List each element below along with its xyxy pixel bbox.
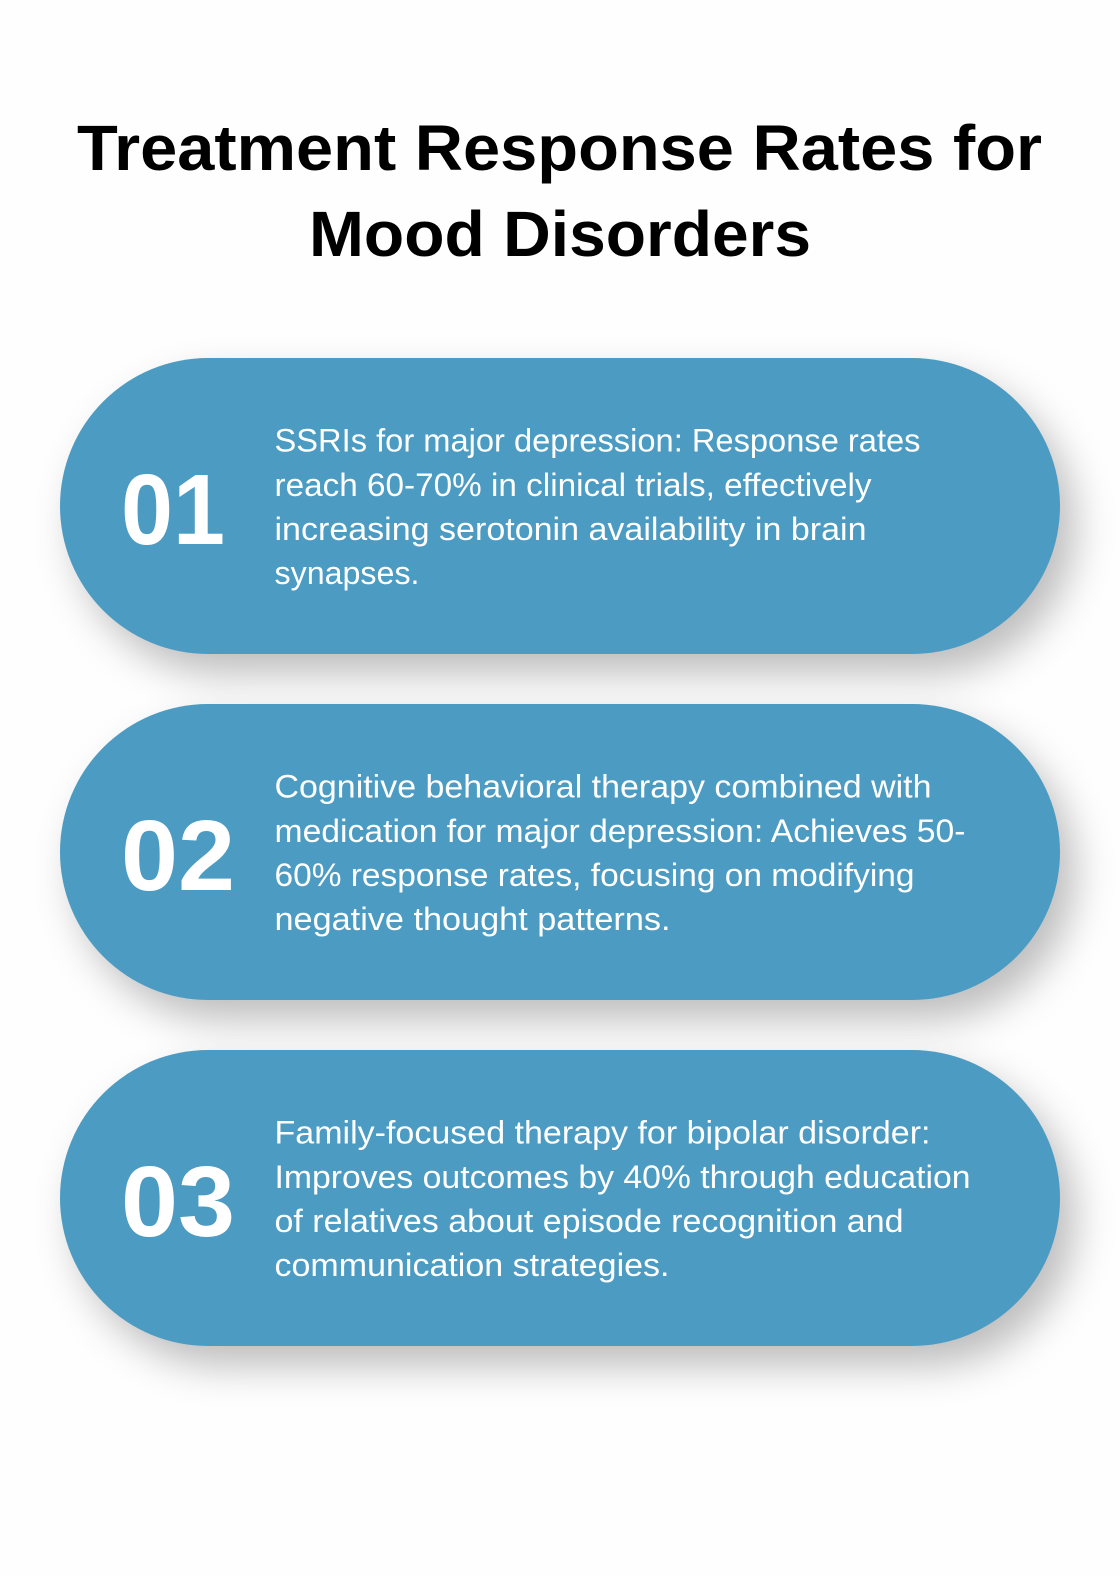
text block: family-focused therapy	[274, 1114, 970, 1283]
panel: family-focused therapy	[60, 1050, 1060, 1346]
title: Mood Disorders	[309, 198, 811, 270]
text block: SSRIs: increasing serotonin availability in brain	[274, 511, 866, 547]
text block: SSRIs: synapses.	[274, 555, 420, 591]
title: Treatment Response Rates for	[77, 112, 1042, 184]
text block: family-focused therapy: of relatives about episode recognition and	[274, 1203, 904, 1239]
text block: SSRIs: reach 60-70% in clinical trials, effectively	[274, 467, 872, 503]
text block: CBT	[274, 768, 966, 937]
text block: SSRIs: SSRIs for major depression: Response rates	[274, 422, 920, 458]
text block: CBT: Cognitive behavioral therapy combined with	[274, 768, 932, 804]
number 02: 02	[121, 800, 235, 912]
text block: family-focused therapy: communication strategies.	[274, 1247, 670, 1283]
text block: SSRIs	[274, 422, 920, 591]
title	[77, 112, 1042, 270]
number 03: 03	[121, 1146, 235, 1258]
text block: CBT: medication for major depression: Achieves 50-	[274, 813, 966, 849]
text block: CBT: 60% response rates, focusing on modifying	[274, 857, 915, 893]
number 01: 01	[121, 454, 225, 566]
panel: cognitive behavioral therapy	[60, 704, 1060, 1000]
text block: family-focused therapy: Improves outcomes by 40% through education	[274, 1159, 970, 1195]
panel: SSRIs for major depression	[60, 358, 1060, 654]
text block: family-focused therapy: Family-focused therapy for bipolar disorder:	[274, 1114, 930, 1150]
text block: CBT: negative thought patterns.	[274, 901, 670, 937]
